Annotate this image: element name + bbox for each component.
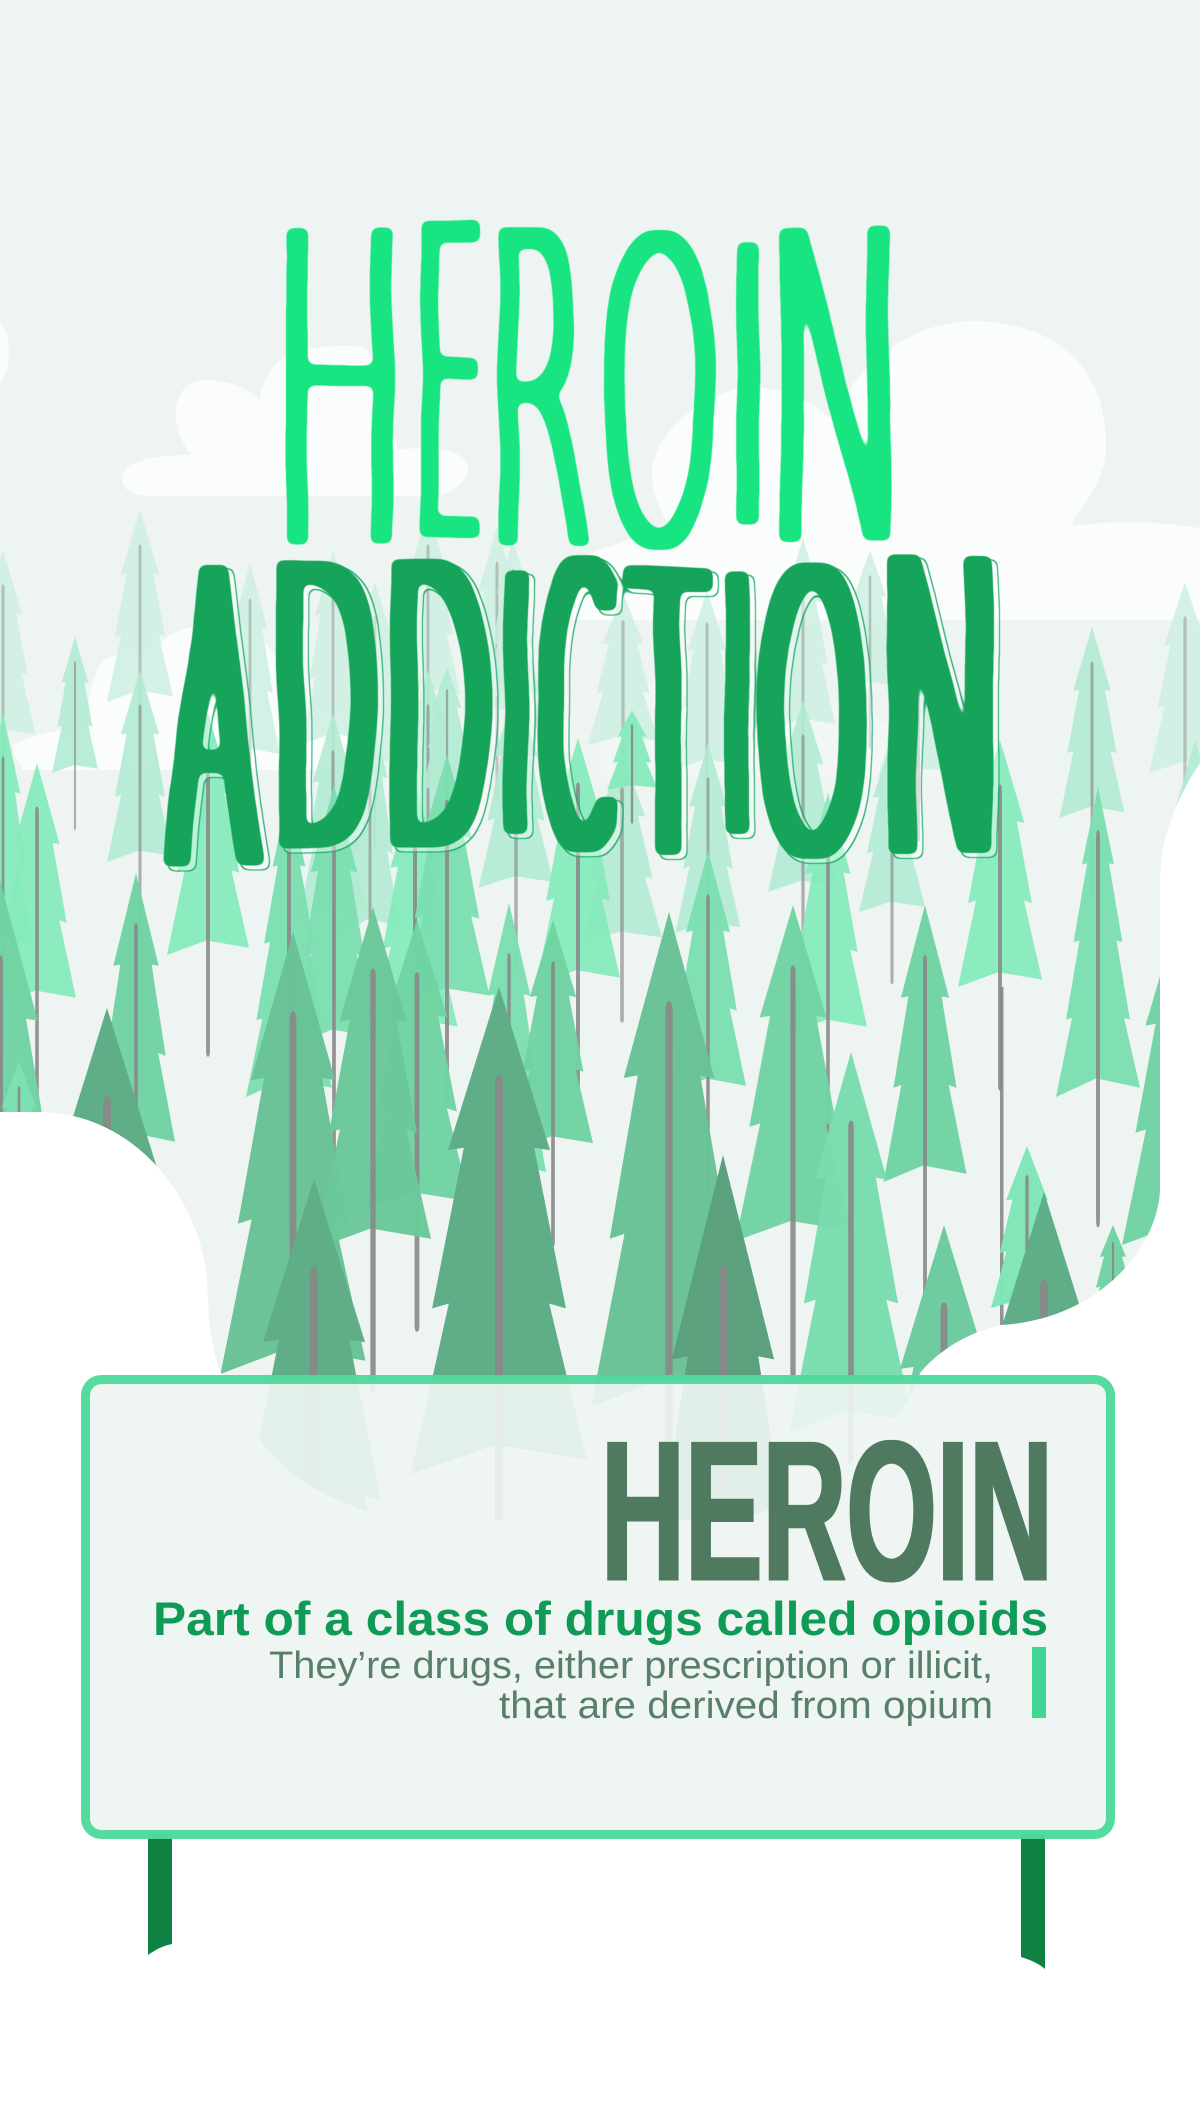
- sixth row trees: [0, 907, 1063, 1836]
- title: ADDICTION: C: [539, 489, 613, 934]
- title: ADDICTION: N: [876, 481, 1010, 944]
- sign body text: that are derived from opium: [499, 1685, 993, 1727]
- title: HEROIN: E: [413, 137, 485, 636]
- fourth row trees: [246, 755, 1140, 1296]
- title: ADDICTION: A: [169, 491, 257, 955]
- title: HEROIN: R: [486, 146, 592, 643]
- panel: sign board: [86, 1380, 1110, 1834]
- sign body text: They’re drugs, either prescription or illicit,: [269, 1645, 993, 1687]
- sign underlay: [85, 1379, 1111, 1835]
- accent bar: [1032, 1647, 1046, 1718]
- title: HEROIN: H: [269, 146, 411, 644]
- third row trees: [0, 710, 1042, 1327]
- panel: forest of pine trees: [0, 510, 1200, 2021]
- title: ADDICTION: D: [271, 489, 379, 935]
- fifth row trees: [0, 873, 1200, 1476]
- title: ADDICTION: D: [384, 489, 492, 935]
- second row trees: [52, 627, 1200, 1038]
- title: HEROIN: I: [719, 169, 777, 612]
- sign body text: [269, 1645, 993, 1727]
- front row dark trees: [73, 988, 1107, 1839]
- sky panel: [0, 0, 1200, 1520]
- back row trees: [0, 510, 1200, 853]
- sign subheading: Part of a class of drugs called opioids: [153, 1592, 1048, 1645]
- sign post: right: [1021, 1832, 1045, 1969]
- title: ADDICTION: [169, 481, 1010, 955]
- title: ADDICTION: I: [725, 505, 749, 913]
- title: HEROIN: N: [761, 145, 915, 639]
- title: HEROIN: O: [596, 158, 723, 640]
- title: ADDICTION: T: [630, 496, 706, 942]
- title: ADDICTION: O: [755, 497, 869, 941]
- title: ADDICTION: I: [504, 505, 528, 913]
- clouds: [0, 321, 1200, 777]
- title: HEROIN: [269, 137, 915, 644]
- sign post: left: [148, 1832, 172, 1955]
